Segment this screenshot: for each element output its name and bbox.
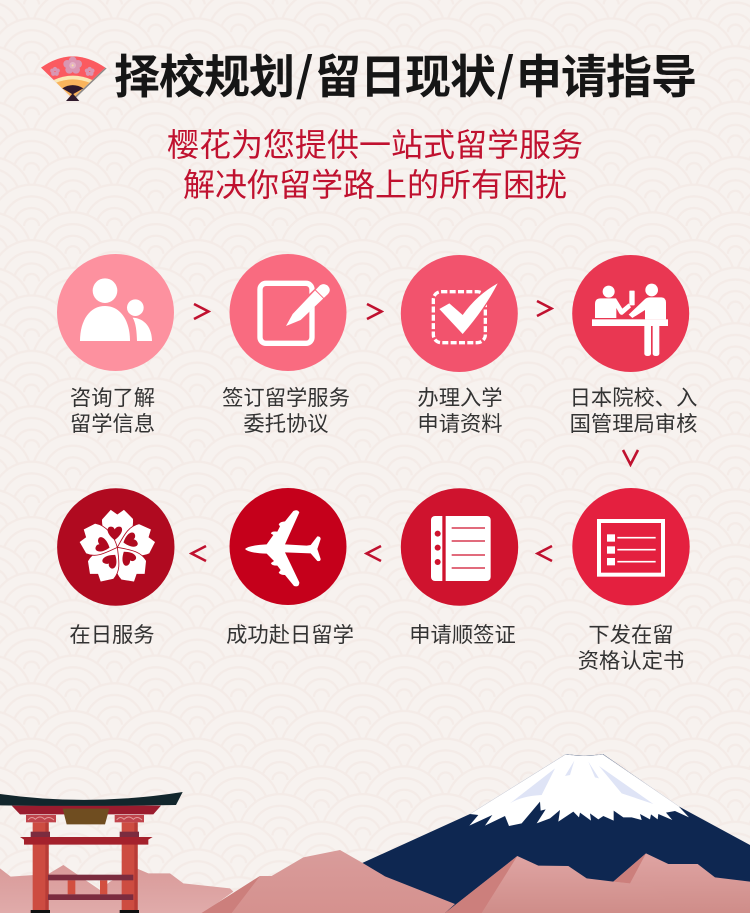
torii gate (0, 792, 183, 913)
hills: front range right (445, 853, 750, 913)
label: step 1 (70, 386, 155, 436)
arrow: step 7 to 8 (189, 544, 207, 562)
label: step 1: 咨询了解 (70, 386, 155, 410)
title: 择校规划 留日现状 申请指导 (114, 51, 696, 103)
step 8 icon: cherry blossom (57, 488, 174, 606)
arrow: step 3 to 4 (536, 300, 554, 318)
label: step 3: 办理入学 (417, 386, 503, 410)
arrow: step 6 to 7 (364, 544, 382, 562)
label: step 6: 申请顺签证 (409, 623, 516, 647)
arrow: step 4 to 5 (622, 449, 640, 467)
arrow: step 1 to 2 (193, 302, 211, 320)
hills: left ranges (0, 850, 455, 913)
scenery: Mount Fuji, hills and torii gate (0, 754, 750, 913)
step 5 icon: certificate list (572, 488, 690, 606)
title: / (497, 39, 514, 105)
label: step 4: 日本院校、入 (570, 386, 697, 410)
label: step 2 (222, 386, 350, 436)
label: step 5: 下发在留 (588, 623, 674, 647)
label: step 3 (417, 386, 503, 436)
subtitle line 1: 樱花为您提供一站式留学服务 (167, 127, 583, 163)
subtitle line 2: 解决你留学路上的所有困扰 (183, 167, 567, 203)
icon: folding fan (41, 56, 106, 101)
label: step 4: 国管理局审核 (570, 412, 697, 436)
title: / (296, 39, 313, 105)
label: step 3: 申请资料 (417, 412, 503, 436)
label: step 5 (578, 623, 684, 673)
step 3 icon: application checklist (400, 255, 518, 372)
step 1 icon: consultation (57, 254, 174, 371)
label: step 2: 委托协议 (243, 412, 329, 436)
arrow: step 2 to 3 (366, 302, 384, 320)
label: step 7: 成功赴日留学 (226, 623, 354, 647)
label: step 5: 资格认定书 (578, 649, 684, 673)
step 2 icon: signing agreement (230, 254, 346, 371)
label: step 1: 留学信息 (70, 412, 155, 436)
step 6 icon: visa notebook (400, 488, 518, 606)
label: step 4 (570, 386, 697, 436)
label: step 8: 在日服务 (69, 623, 155, 647)
step 7 icon: airplane (230, 488, 346, 605)
label: step 2: 签订留学服务 (222, 386, 350, 410)
arrow: step 5 to 6 (535, 544, 553, 562)
mountain: Fuji (360, 754, 750, 913)
step 4 icon: school and immigration review (572, 255, 690, 372)
